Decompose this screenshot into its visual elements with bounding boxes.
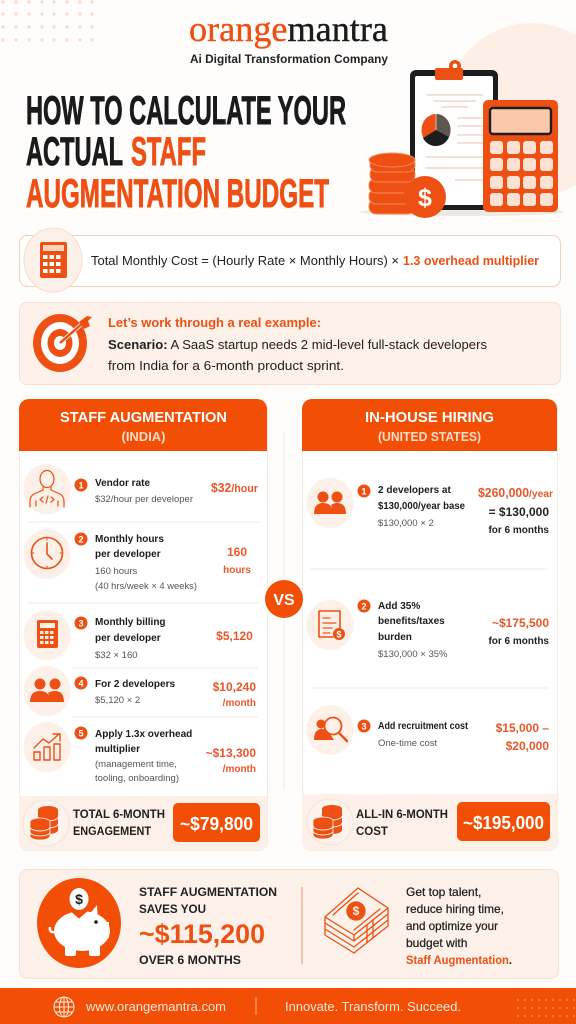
VS badge: VS xyxy=(273,592,295,609)
panel header: in-house hiring: IN-HOUSE HIRING xyxy=(365,409,494,426)
step 2: benefits and taxes: Add 35% xyxy=(378,601,420,612)
illustration: clipboard, calculator and coins xyxy=(360,60,564,218)
step 1: vendor rate: $32/hour xyxy=(211,481,259,495)
icon: coin stacks xyxy=(313,805,342,839)
scenario text: from India for a 6-month product sprint. xyxy=(108,358,344,373)
icon: people xyxy=(314,492,346,514)
icon: recruitment search xyxy=(314,718,347,741)
total: in-house hiring: ~$195,000 xyxy=(463,812,544,833)
footer bar: Innovate. Transform. Succeed. xyxy=(285,999,461,1014)
call to action text: and optimize your xyxy=(406,919,498,933)
step 1: base salary: 1 xyxy=(361,486,367,496)
step 2: monthly hours: hours xyxy=(223,565,251,576)
panel: in-house hiring xyxy=(302,399,558,850)
step 3: recruitment cost: 3 xyxy=(361,722,367,732)
step 1: vendor rate xyxy=(24,464,259,514)
icon: calculator xyxy=(483,100,558,212)
total: in-house hiring: ALL-IN 6-MONTH xyxy=(356,809,448,821)
panel: staff augmentation xyxy=(19,399,268,850)
title: STAFF xyxy=(131,130,206,174)
step 5: overhead multiplier xyxy=(24,722,256,784)
step 3: monthly billing: $32 × 160 xyxy=(95,650,138,661)
scenario text: Scenario: A SaaS startup needs 2 mid-level full-stack developers xyxy=(108,337,487,352)
icon: target with arrow xyxy=(33,314,92,372)
total: staff augmentation: TOTAL 6-MONTH xyxy=(73,809,165,821)
step 4: two developers: 4 xyxy=(78,678,84,688)
icon: money stack xyxy=(325,888,388,953)
step 4: two developers: /month xyxy=(223,698,256,709)
step 5: overhead multiplier: tooling, onboarding) xyxy=(95,773,179,784)
logo: orangemantra xyxy=(189,9,388,66)
formula text: Total Monthly Cost = (Hourly Rate × Monthly Hours) × xyxy=(91,253,399,268)
step 4: two developers: $5,120 × 2 xyxy=(95,695,140,706)
step 3: monthly billing xyxy=(24,610,253,661)
icon: clipboard xyxy=(410,60,498,210)
savings text: SAVES YOU xyxy=(139,902,206,916)
panel header: staff augmentation xyxy=(19,399,267,451)
step 1: vendor rate: Vendor rate xyxy=(95,478,150,489)
step 4: two developers xyxy=(24,666,256,716)
icon: document with dollar xyxy=(319,611,345,640)
step 2: benefits and taxes xyxy=(306,600,549,660)
step 3: monthly billing: per developer xyxy=(95,633,161,644)
step 2: monthly hours: 160 xyxy=(227,545,247,559)
step 3: monthly billing: Monthly billing xyxy=(95,617,166,628)
footer bar: www.orangemantra.com xyxy=(85,999,226,1014)
panel header: in-house hiring xyxy=(302,399,557,451)
step 2: benefits and taxes: ~$175,500 xyxy=(492,616,549,630)
icon: dollar coin xyxy=(404,176,446,218)
title xyxy=(26,89,346,216)
step 5: overhead multiplier: (management time, xyxy=(95,759,177,770)
step 5: overhead multiplier: 5 xyxy=(78,728,84,738)
step 5: overhead multiplier: ~$13,300 xyxy=(206,746,256,760)
icon: piggy bank: $ xyxy=(75,891,83,907)
step 1: vendor rate: 1 xyxy=(78,480,84,490)
scenario text xyxy=(108,315,487,373)
total: staff augmentation: ~$79,800 xyxy=(180,813,253,834)
footer bar xyxy=(0,988,576,1024)
icon: dollar coin: $ xyxy=(418,184,432,212)
savings text: ~$115,200 xyxy=(139,919,265,949)
step 2: benefits and taxes: $130,000 × 35% xyxy=(378,649,448,660)
total: staff augmentation: ENGAGEMENT xyxy=(73,826,151,838)
panel header: staff augmentation: (INDIA) xyxy=(122,429,166,444)
step 3: recruitment cost: Add recruitment cost xyxy=(378,721,469,732)
VS badge xyxy=(265,580,303,618)
savings text: STAFF AUGMENTATION xyxy=(139,885,277,899)
step 5: overhead multiplier: multiplier xyxy=(95,744,140,755)
step 1: base salary: 2 developers at xyxy=(378,485,451,496)
step 2: benefits and taxes: for 6 months xyxy=(488,636,549,647)
step 2: monthly hours: per developer xyxy=(95,549,161,560)
icon: developer xyxy=(30,470,64,507)
step 1: base salary: = $130,000 xyxy=(489,505,549,519)
savings text: OVER 6 MONTHS xyxy=(139,953,241,967)
savings panel xyxy=(20,870,558,978)
formula text xyxy=(91,253,539,268)
pie chart xyxy=(422,114,450,146)
step 1: base salary: $130,000 × 2 xyxy=(378,518,434,529)
step 3: recruitment cost xyxy=(306,705,549,755)
logo: orangemantra: orangemantra xyxy=(189,9,388,49)
call to action text: Staff Augmentation. xyxy=(406,953,512,967)
step 3: recruitment cost: One-time cost xyxy=(378,738,437,749)
icon: document with dollar: $ xyxy=(336,630,342,640)
total: staff augmentation xyxy=(19,796,267,850)
step 2: monthly hours: 2 xyxy=(78,534,84,544)
call to action text: Get top talent, xyxy=(406,885,481,899)
step 3: monthly billing: $5,120 xyxy=(216,629,253,643)
money stack dollar sign: $ xyxy=(353,904,360,918)
logo: orangemantra: Ai Digital Transformation Company xyxy=(190,52,388,66)
step 3: recruitment cost: $15,000 – xyxy=(496,721,549,735)
icon: calculator xyxy=(37,620,58,648)
step 1: base salary: for 6 months xyxy=(488,525,549,536)
step 1: base salary: $260,000/year xyxy=(478,486,553,500)
savings text xyxy=(139,885,277,967)
icon: growth chart xyxy=(34,734,60,760)
step 2: benefits and taxes: burden xyxy=(378,632,412,643)
step 2: monthly hours: (40 hrs/week × 4 weeks) xyxy=(95,581,197,592)
total: in-house hiring: COST xyxy=(356,826,388,838)
step 1: base salary: $130,000/year base xyxy=(378,501,465,512)
panel header: in-house hiring: (UNITED STATES) xyxy=(378,429,481,444)
title: HOW TO CALCULATE YOUR xyxy=(26,89,346,133)
icon: calculator badge xyxy=(24,228,82,292)
step 2: monthly hours xyxy=(24,529,251,592)
step 3: monthly billing: 3 xyxy=(78,618,84,628)
call to action text: budget with xyxy=(406,936,467,950)
scenario panel xyxy=(20,302,560,384)
title: AUGMENTATION BUDGET xyxy=(26,172,329,216)
icon: piggy bank xyxy=(37,878,121,968)
step 1: base salary xyxy=(306,478,553,536)
step 2: monthly hours: 160 hours xyxy=(95,566,138,577)
total: in-house hiring xyxy=(302,794,557,850)
icon: globe xyxy=(54,997,74,1017)
step 3: recruitment cost: $20,000 xyxy=(506,739,549,753)
step 4: two developers: $10,240 xyxy=(213,680,256,694)
formula panel xyxy=(20,228,560,292)
step 2: benefits and taxes: benefits/taxes xyxy=(378,616,445,627)
step 2: monthly hours: Monthly hours xyxy=(95,534,164,545)
step 1: vendor rate: $32/hour per developer xyxy=(95,494,193,505)
icon: clock xyxy=(32,538,62,568)
step 5: overhead multiplier: /month xyxy=(223,764,256,775)
scenario text: Let’s work through a real example: xyxy=(108,315,321,330)
icon: people xyxy=(30,678,64,702)
icon: coin stacks xyxy=(30,806,58,840)
call to action text: reduce hiring time, xyxy=(406,902,504,916)
step 4: two developers: For 2 developers xyxy=(95,679,175,690)
icon: coin stack xyxy=(369,153,415,214)
formula text: 1.3 overhead multiplier xyxy=(403,253,539,268)
step 2: benefits and taxes: 2 xyxy=(361,602,367,612)
call to action text xyxy=(406,885,512,967)
panel header: staff augmentation: STAFF AUGMENTATION xyxy=(60,409,227,426)
step 5: overhead multiplier: Apply 1.3x overhead xyxy=(95,729,192,740)
title: ACTUAL xyxy=(26,130,123,174)
